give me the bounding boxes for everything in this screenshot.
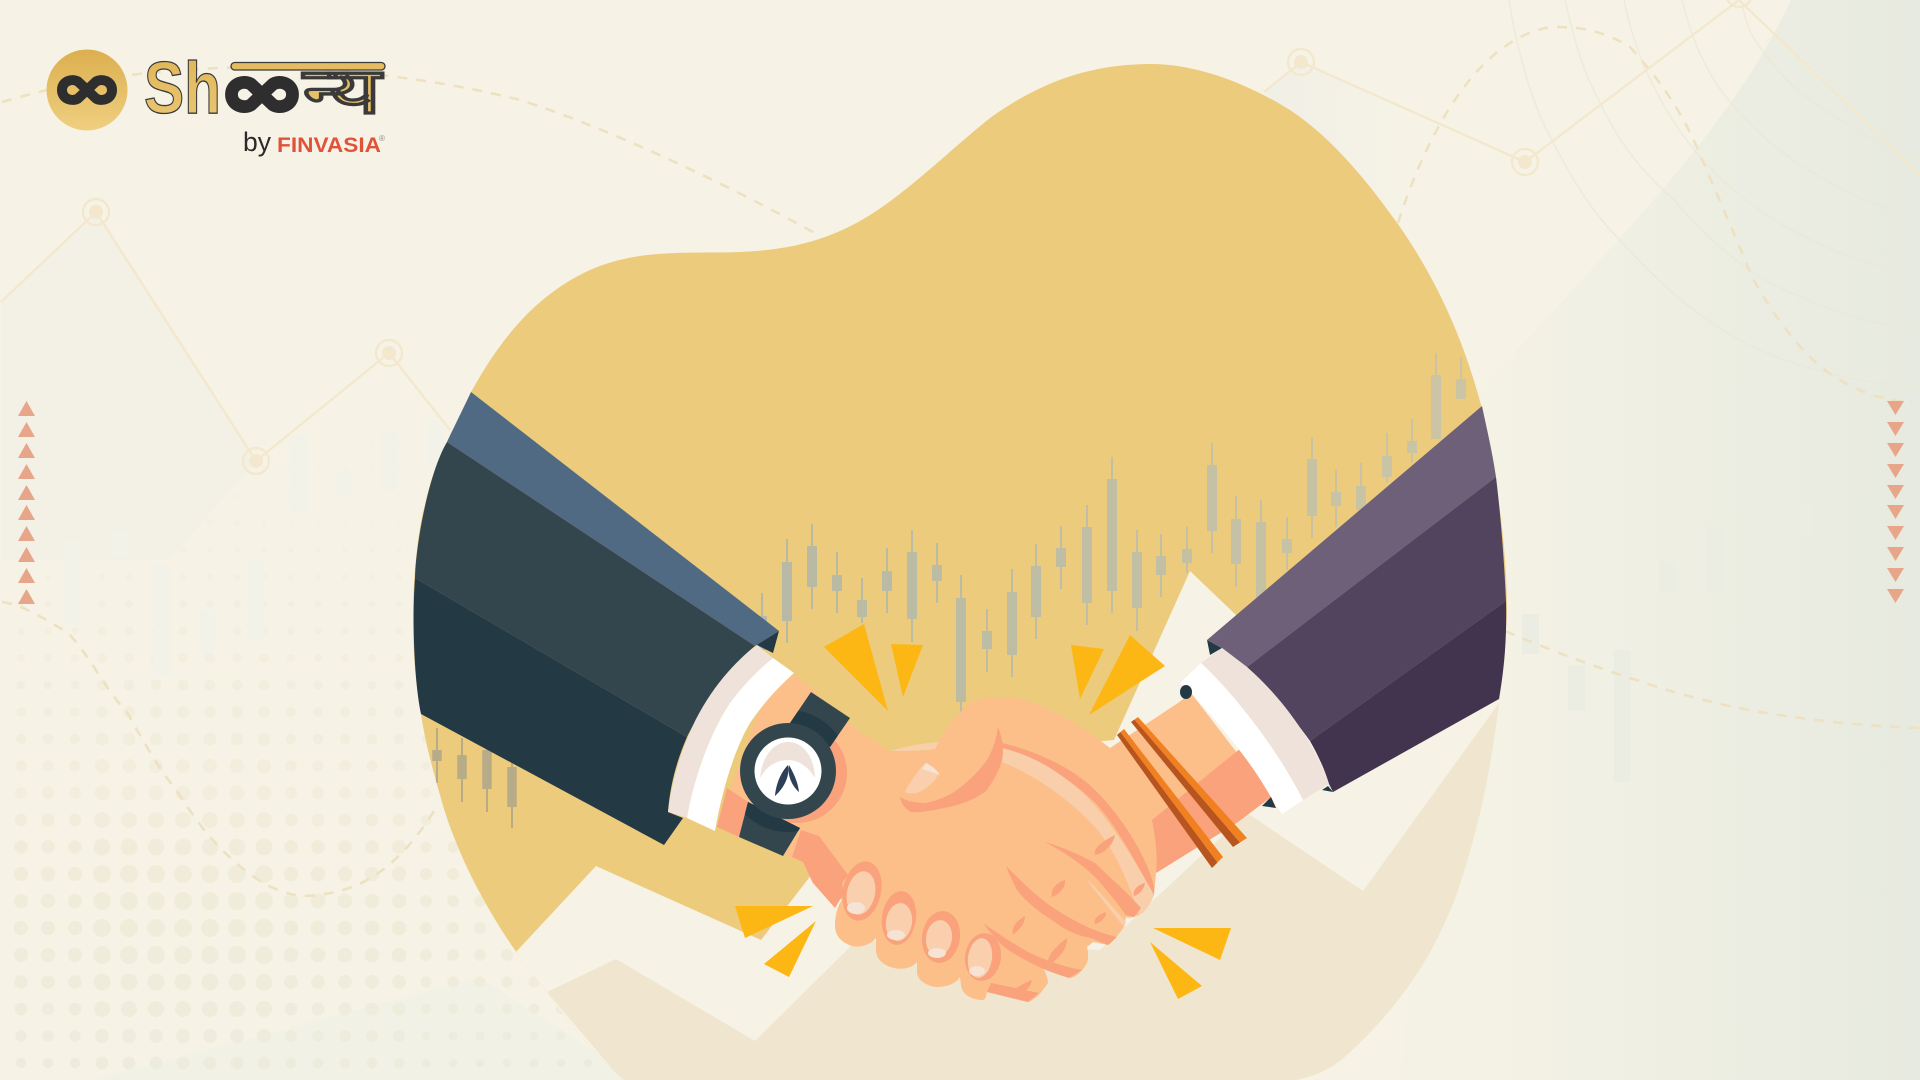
background halftone dots xyxy=(21,388,616,1063)
logo wordmark top bar xyxy=(231,62,385,70)
cuff shadows xyxy=(1180,685,1333,808)
cuff beige xyxy=(1201,648,1329,800)
watch face crescent xyxy=(760,742,815,778)
lining dots xyxy=(1207,640,1222,655)
finger three xyxy=(919,909,963,965)
hand base xyxy=(760,673,1271,1002)
sleeve low band xyxy=(1310,601,1506,792)
down arrows column xyxy=(1887,401,1904,603)
knuckle arc shadow xyxy=(1002,743,1154,895)
concentric arcs top right xyxy=(1509,0,1920,387)
sleeve top band xyxy=(447,392,779,646)
watch case xyxy=(740,723,836,819)
lower left candles xyxy=(437,728,512,828)
logo emblem xyxy=(46,50,128,130)
sleeve mid band xyxy=(415,442,755,737)
left hand and sleeve xyxy=(414,392,889,857)
palm highlight xyxy=(891,742,939,751)
knuckle arc highlight xyxy=(1002,748,1154,915)
logo xyxy=(46,48,385,157)
bangle two xyxy=(1131,717,1247,847)
second finger shadow xyxy=(1045,842,1141,917)
right sleeve xyxy=(1180,406,1506,814)
fourth finger shadow xyxy=(983,923,1082,978)
forearm shadow xyxy=(1152,748,1271,873)
faint background candlesticks right xyxy=(1522,492,1814,782)
finger four xyxy=(962,931,1004,983)
up arrows column xyxy=(18,401,35,604)
faint background candlesticks left xyxy=(63,420,445,677)
thumb nail tip xyxy=(922,763,940,775)
registered mark: ® xyxy=(379,134,385,143)
sleeve inner lining xyxy=(755,631,779,653)
cuff white xyxy=(1180,663,1303,814)
by text: by xyxy=(243,127,271,157)
logo wordmark Sh: Sh xyxy=(144,48,221,129)
palm underside shadow xyxy=(792,830,848,908)
blob fill xyxy=(400,50,1520,1080)
pinky shadow xyxy=(987,983,1039,1002)
centre candlestick chart xyxy=(762,353,1461,712)
clasped hands xyxy=(760,673,1271,1002)
finger two xyxy=(878,889,920,947)
cuff beige xyxy=(668,645,773,818)
hand creases xyxy=(1012,835,1145,998)
logo wordmark devanagari: न्य xyxy=(302,55,385,127)
bangle one xyxy=(1117,729,1223,868)
strap inner shade xyxy=(744,710,838,832)
left wrist xyxy=(717,665,889,857)
sleeve top band xyxy=(1207,406,1496,667)
sleeve mid band xyxy=(1247,477,1506,741)
central blob xyxy=(400,50,1520,1080)
watch hands xyxy=(775,765,799,796)
burst triangles xyxy=(735,624,1231,999)
finger one xyxy=(837,858,887,924)
right line chart with markers xyxy=(1264,0,1920,175)
cuff white xyxy=(687,658,794,831)
finvasia text: FINVASIA xyxy=(277,134,381,157)
watch face xyxy=(754,738,822,804)
watch strap xyxy=(739,692,850,856)
left wrist shadow xyxy=(717,788,748,837)
wristwatch xyxy=(727,692,850,856)
left line chart with markers xyxy=(1,199,450,474)
sleeve low band xyxy=(414,578,687,845)
watch shadow xyxy=(747,723,847,823)
cream mountain xyxy=(500,571,1520,1080)
logo infinity letter xyxy=(232,82,292,107)
beige mountain xyxy=(547,703,1520,1080)
thumb shadow xyxy=(900,727,1003,812)
thumb nail xyxy=(905,763,939,793)
third finger shadow xyxy=(1006,866,1117,945)
second finger highlight xyxy=(1045,842,1126,927)
